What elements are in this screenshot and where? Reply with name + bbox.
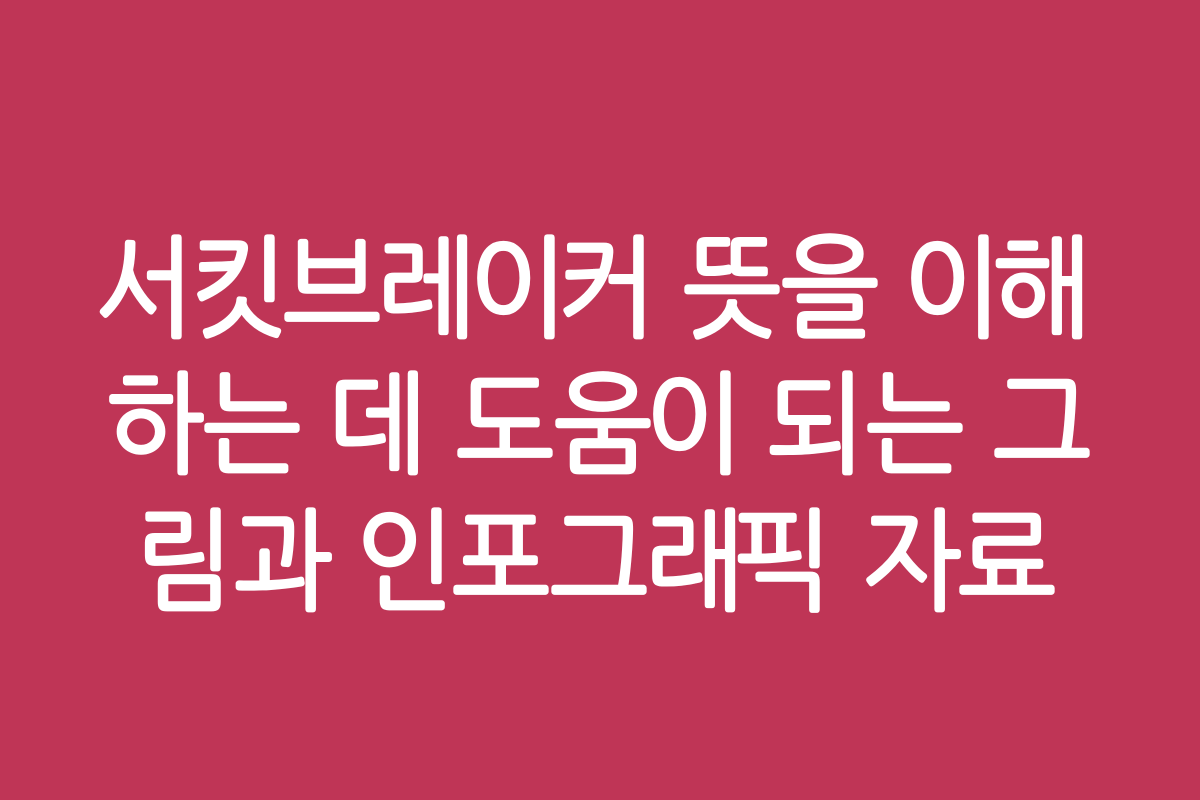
title line 3: 림과 인포그래픽 자료 <box>135 501 1056 624</box>
title line 2: 하는 데 도움이 되는 그 <box>106 364 1091 487</box>
title line 1: 서킷브레이커 뜻을 이해 <box>96 228 1091 351</box>
